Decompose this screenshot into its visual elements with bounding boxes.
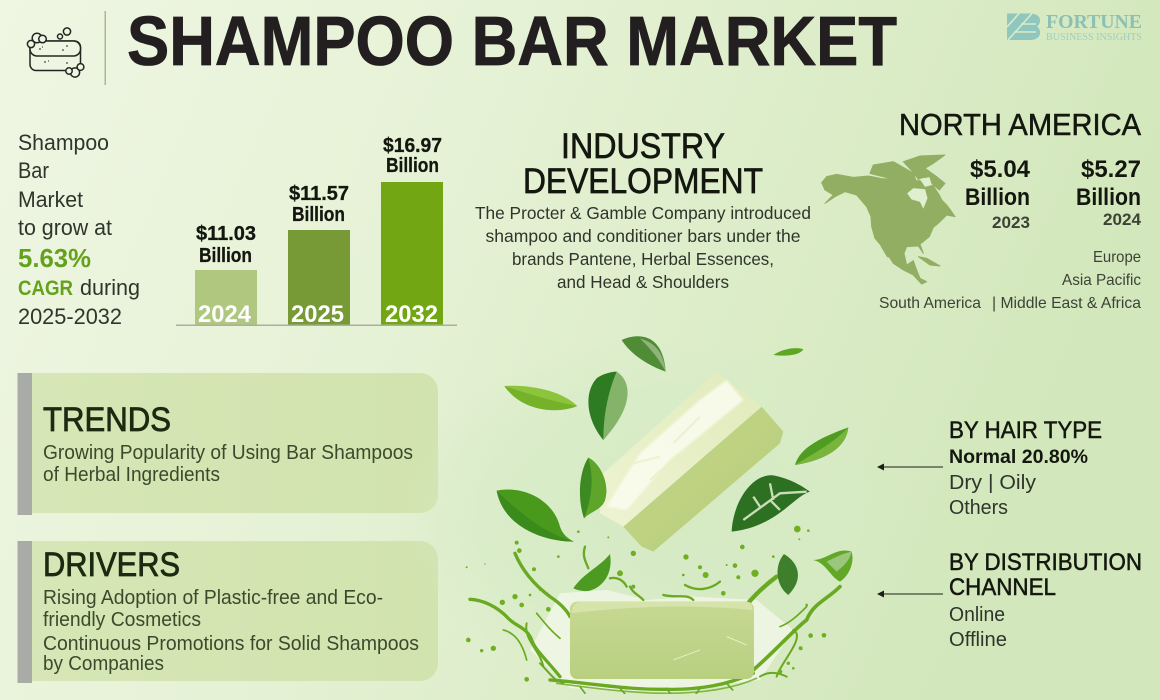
bar: 2024 bbox=[195, 223, 257, 328]
logo: Fortune Business Insights: FORTUNE bbox=[1046, 11, 1142, 33]
leaves bbox=[497, 336, 853, 595]
text block: other regions bbox=[879, 249, 1141, 312]
text block: industry development body: brands Pantene, Herbal Essences, bbox=[512, 249, 774, 269]
heading: industry development: DEVELOPMENT bbox=[523, 162, 763, 201]
heading: industry development: INDUSTRY bbox=[561, 127, 725, 166]
bar: 2024: $11.03 bbox=[196, 223, 256, 245]
bar: 2032: Billion bbox=[386, 155, 439, 177]
stat: 2024 value bbox=[1076, 156, 1142, 229]
title: SHAMPOO BAR MARKET bbox=[127, 2, 897, 80]
text block: market growth statement: Market bbox=[18, 187, 83, 212]
stat: 2024 value: Billion bbox=[1076, 184, 1141, 211]
text block: industry development body bbox=[475, 203, 811, 292]
icon: soap bar with bubbles bbox=[27, 28, 84, 77]
text block: market growth statement: to grow at bbox=[18, 215, 112, 240]
illustration: soap bars, leaves and splash bbox=[400, 336, 920, 694]
logo: Fortune Business Insights: BUSINESS INSIGHTS bbox=[1046, 32, 1142, 43]
bar: 2032 bbox=[381, 135, 443, 328]
heading: industry development bbox=[523, 127, 763, 201]
bar: 2032: $16.97 bbox=[383, 135, 442, 157]
text block: by hair type: Dry | Oily bbox=[949, 472, 1036, 494]
text block: other regions: Asia Pacific bbox=[1062, 272, 1141, 289]
text block: industry development body: shampoo and conditioner bars under the bbox=[486, 226, 800, 246]
text block: by distribution channel: CHANNEL bbox=[949, 574, 1056, 601]
bar: 2025 bbox=[288, 183, 350, 328]
text block: industry development body: and Head & Shoulders bbox=[557, 272, 729, 292]
text block: market growth statement bbox=[18, 130, 140, 329]
map: north america bbox=[822, 155, 955, 284]
text block: by hair type: BY HAIR TYPE bbox=[949, 417, 1102, 444]
panel: drivers bbox=[18, 541, 438, 683]
text block: other regions: | Middle East & Africa bbox=[992, 295, 1141, 312]
stat: 2023 value: $5.04 bbox=[970, 156, 1031, 183]
stat: 2023 value: Billion bbox=[965, 184, 1030, 211]
panel: trends: of Herbal Ingredients bbox=[43, 464, 220, 486]
panel: drivers: friendly Cosmetics bbox=[43, 609, 201, 631]
text block: by hair type bbox=[949, 417, 1102, 519]
stat: 2024 value: 2024 bbox=[1103, 210, 1142, 229]
soap bar: upper bbox=[600, 372, 783, 552]
bar: 2032: 2032 bbox=[385, 301, 438, 328]
text block: market growth statement: Shampoo bbox=[18, 130, 109, 155]
stat: 2023 value: 2023 bbox=[992, 213, 1030, 232]
text block: market growth statement: Bar bbox=[18, 158, 49, 183]
text block: by hair type: Normal 20.80% bbox=[949, 447, 1088, 468]
arrow: to distribution channel bbox=[877, 590, 943, 598]
text block: by distribution channel: BY DISTRIBUTION bbox=[949, 549, 1142, 576]
panel: trends bbox=[18, 373, 438, 515]
text block: by hair type: Others bbox=[949, 497, 1008, 519]
text block: market growth statement: 5.63% bbox=[18, 243, 91, 273]
text block: market growth statement: during bbox=[80, 275, 140, 300]
text block: by distribution channel: Online bbox=[949, 604, 1005, 626]
panel: drivers: by Companies bbox=[43, 653, 164, 675]
logo: Fortune Business Insights bbox=[1007, 11, 1142, 43]
text block: market growth statement: CAGR bbox=[18, 277, 73, 300]
splash bbox=[466, 526, 840, 694]
panel: drivers: Continuous Promotions for Solid Shampoos bbox=[43, 633, 419, 655]
map: hudson bay bbox=[907, 177, 932, 208]
text block: by distribution channel: Offline bbox=[949, 629, 1007, 651]
stat: 2023 value bbox=[965, 156, 1031, 232]
divider bbox=[104, 11, 106, 85]
stat: 2024 value: $5.27 bbox=[1081, 156, 1141, 183]
panel: drivers: DRIVERS bbox=[43, 546, 180, 584]
text block: other regions: Europe bbox=[1093, 249, 1141, 266]
bar: 2025: $11.57 bbox=[289, 183, 349, 205]
bar: 2025: 2025 bbox=[291, 301, 344, 328]
text block: other regions: South America bbox=[879, 295, 981, 312]
bar chart: market size bbox=[176, 135, 457, 328]
text block: by distribution channel bbox=[949, 549, 1142, 651]
text block: industry development body: The Procter & Gamble Company introduced bbox=[475, 203, 811, 223]
soap bar: lower bbox=[570, 602, 754, 679]
heading: north america: NORTH AMERICA bbox=[899, 107, 1141, 142]
bar: 2024: Billion bbox=[199, 245, 252, 267]
text block: market growth statement: 2025-2032 bbox=[18, 304, 122, 329]
pale backdrop glow bbox=[400, 337, 920, 690]
panel: trends: Growing Popularity of Using Bar Shampoos bbox=[43, 442, 413, 464]
arrow: to hair type bbox=[877, 464, 943, 470]
panel: trends: TRENDS bbox=[43, 401, 171, 439]
panel: drivers: Rising Adoption of Plastic-free and Eco- bbox=[43, 587, 383, 609]
bar: 2025: Billion bbox=[292, 204, 345, 226]
bar: 2024: 2024 bbox=[198, 301, 252, 328]
